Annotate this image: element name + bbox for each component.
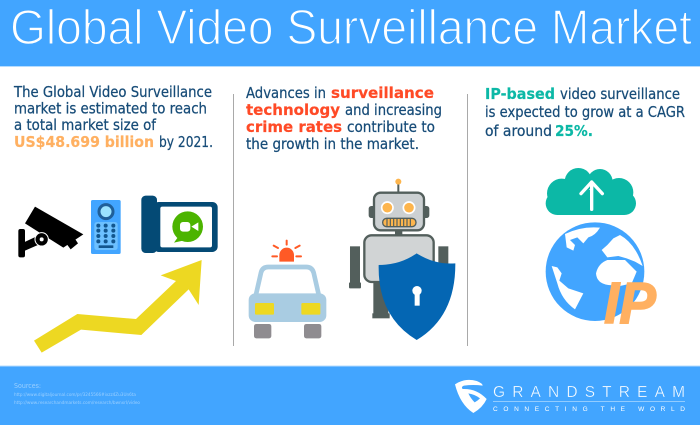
icon label: IP: IP xyxy=(604,271,656,336)
text block: drivers: Advances in xyxy=(246,84,326,102)
header banner xyxy=(0,0,700,67)
icon: security camera xyxy=(18,207,83,257)
text block: drivers: and increasing xyxy=(345,101,442,119)
text block: IP growth: video surveillance xyxy=(560,85,680,103)
text block: IP growth xyxy=(485,85,685,140)
panel: IP-based growth xyxy=(485,85,685,336)
arrow: rising trend xyxy=(34,260,202,353)
panel: technology and crime xyxy=(246,84,455,340)
sources: http://www.digitaljournal.com/pr/3245566#ixzz4Zu3Un6ta xyxy=(14,392,136,398)
icon: video phone xyxy=(141,196,218,253)
text block: drivers: technology xyxy=(246,101,340,119)
icon: globe xyxy=(546,222,644,321)
sources xyxy=(14,382,140,406)
divider xyxy=(467,94,468,346)
footer band xyxy=(0,366,700,425)
text block: drivers: surveillance xyxy=(331,84,434,102)
divider xyxy=(233,94,234,346)
text block: drivers: contribute to xyxy=(347,118,435,136)
icon: door keypad xyxy=(91,200,121,254)
wordmark: GRANDSTREAM xyxy=(493,384,685,401)
text block: drivers: the growth in the market. xyxy=(246,135,419,153)
text block: drivers xyxy=(246,84,442,153)
logo mark xyxy=(455,380,487,413)
text block: drivers: crime rates xyxy=(246,118,342,136)
icon: shield with keyhole xyxy=(379,253,455,340)
text block: market size xyxy=(13,83,213,151)
icon: police car xyxy=(249,241,326,338)
text block: IP growth: of around xyxy=(485,122,552,140)
sources: Sources: xyxy=(14,382,41,390)
sources: http://www.researchandmarkets.com/research/bwnxrl/video xyxy=(14,400,140,406)
logo: Grandstream xyxy=(455,380,685,413)
text block: market size: by 2021. xyxy=(159,133,213,151)
text block: IP growth: IP-based xyxy=(485,85,555,103)
text block: IP growth: 25%. xyxy=(555,122,593,140)
icon: cloud upload xyxy=(546,168,636,215)
text block: market size: a total market size of xyxy=(14,116,157,134)
text block: market size: US$48.699 billion xyxy=(14,133,154,151)
panel: market size xyxy=(13,83,218,353)
text block: market size: The Global Video Surveillance xyxy=(13,83,212,101)
tagline: CONNECTING THE WORLD xyxy=(493,406,685,413)
icon: robot xyxy=(349,179,448,318)
text block: market size: market is estimated to reach xyxy=(14,100,207,118)
